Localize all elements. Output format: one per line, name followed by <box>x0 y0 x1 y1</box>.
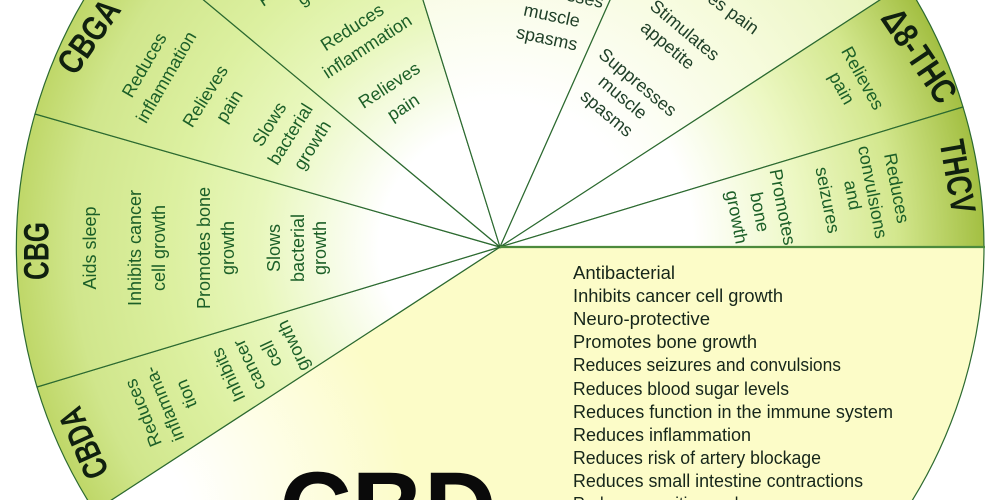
text block: CBGA benefits: growth <box>289 117 335 173</box>
text block: CBD benefits list: Antibacterial <box>573 263 675 283</box>
text block: CBG benefits: bacterial <box>288 214 308 282</box>
panel: CBDA wedge <box>37 247 500 500</box>
text block: THCV benefits <box>722 144 913 247</box>
text block: CBDA benefits: inflamma- <box>140 364 188 444</box>
text block: CBD benefits list: Inhibits cancer cell growth <box>573 286 783 306</box>
text block: delta-8 THC benefits: pain <box>825 68 859 108</box>
text block: top centre wedge benefits <box>508 0 606 55</box>
text block: delta-8 THC benefits: Relieves <box>837 43 888 113</box>
text block: CBDA benefits: Reduces <box>121 376 166 450</box>
text block: upper-left wedge benefits: Reduces <box>317 0 387 55</box>
text block: CBDA benefits: tion <box>172 377 201 411</box>
text block: CBDA benefits <box>121 317 314 450</box>
text block: CBD benefits list: Reduces small intestine contractions <box>573 471 863 491</box>
text block: CBD benefits list: Reduces risk of artery blockage <box>573 448 821 468</box>
panel: CBG wedge <box>16 114 500 387</box>
text block: THCV benefits: Promotes <box>766 167 800 247</box>
text block: THCV benefits: convulsions <box>854 144 891 240</box>
text block: THC benefits: appetite <box>637 17 699 73</box>
text block: CBGA benefits: Relieves <box>178 62 232 131</box>
panel: THC wedge <box>500 0 906 247</box>
text block: CBG benefits: cell growth <box>149 205 169 291</box>
text block: THCV benefits: growth <box>722 189 752 245</box>
text block: top centre wedge benefits: spasms <box>515 22 579 55</box>
text block: THC benefits: Suppresses <box>595 44 681 120</box>
text block: CBGA benefits: bacterial <box>264 100 317 168</box>
text block: THC benefits: spasms <box>577 86 637 141</box>
text block: upper-left wedge benefits <box>254 0 424 125</box>
text block: CBG benefits: Slows <box>264 224 284 272</box>
text block: THC benefits: muscle <box>595 71 651 123</box>
text block: CBDA benefits: cell <box>257 337 286 370</box>
panel: top centre wedge <box>356 0 697 247</box>
label: CBDA: CBDA <box>51 401 117 485</box>
text block: THCV benefits: Reduces <box>880 151 913 225</box>
panel: CBGA wedge <box>35 0 500 247</box>
text block: THCV benefits: bone <box>746 190 773 234</box>
text block: CBG benefits: growth <box>218 221 238 275</box>
text block: THC benefits <box>577 0 763 141</box>
text block: CBG benefits: Aids sleep <box>80 206 100 290</box>
text block: CBGA benefits: Slows <box>248 99 290 150</box>
panel: upper-left wedge <box>128 0 500 247</box>
text block: CBGA benefits <box>118 28 335 173</box>
text block: CBD benefits list: Reduces blood sugar levels <box>573 379 789 399</box>
label: CBG: CBG <box>17 222 56 280</box>
text block: CBD benefits list: Reduces function in the immune system <box>573 402 893 422</box>
text block: top centre wedge benefits: muscle <box>522 0 582 31</box>
text block: CBG benefits: Inhibits cancer <box>125 190 145 306</box>
text block: CBD benefits list: Neuro-protective <box>573 309 710 329</box>
label: Δ8-THC: Δ8-THC <box>873 1 965 111</box>
panel: delta-8 THC wedge <box>500 0 965 247</box>
text block: CBD benefits list <box>573 263 893 500</box>
text block: CBD benefits list: Reduces seizures and convulsions <box>573 355 841 375</box>
text block: CBGA benefits: pain <box>212 86 247 126</box>
text block: CBDA benefits: Inhibits <box>207 345 249 405</box>
panel: CBD wedge <box>94 247 984 500</box>
text block: CBGA benefits: Reduces <box>118 29 171 101</box>
text block: CBGA benefits: inflammation <box>132 28 200 126</box>
panel: THCV wedge <box>500 107 984 247</box>
text block: upper-left wedge benefits: pain <box>383 90 423 125</box>
text block: THCV benefits: and <box>840 178 865 212</box>
text block: CBD benefits list: Reduces inflammation <box>573 425 751 445</box>
text block: CBD benefits list: Promotes bone growth <box>573 332 757 352</box>
text block: CBG benefits <box>80 187 330 309</box>
text block: upper-left wedge benefits: Relieves <box>355 58 424 112</box>
text block: THCV benefits: seizures <box>811 165 844 235</box>
text block: CBDA benefits: growth <box>273 317 314 375</box>
text block: CBG benefits: Promotes bone <box>194 187 214 309</box>
label: THCV: THCV <box>932 137 983 217</box>
text block: upper-left wedge benefits: inflammation <box>319 10 415 82</box>
text block: CBG benefits: growth <box>310 221 330 275</box>
text block: CBDA benefits: cancer <box>229 336 270 394</box>
